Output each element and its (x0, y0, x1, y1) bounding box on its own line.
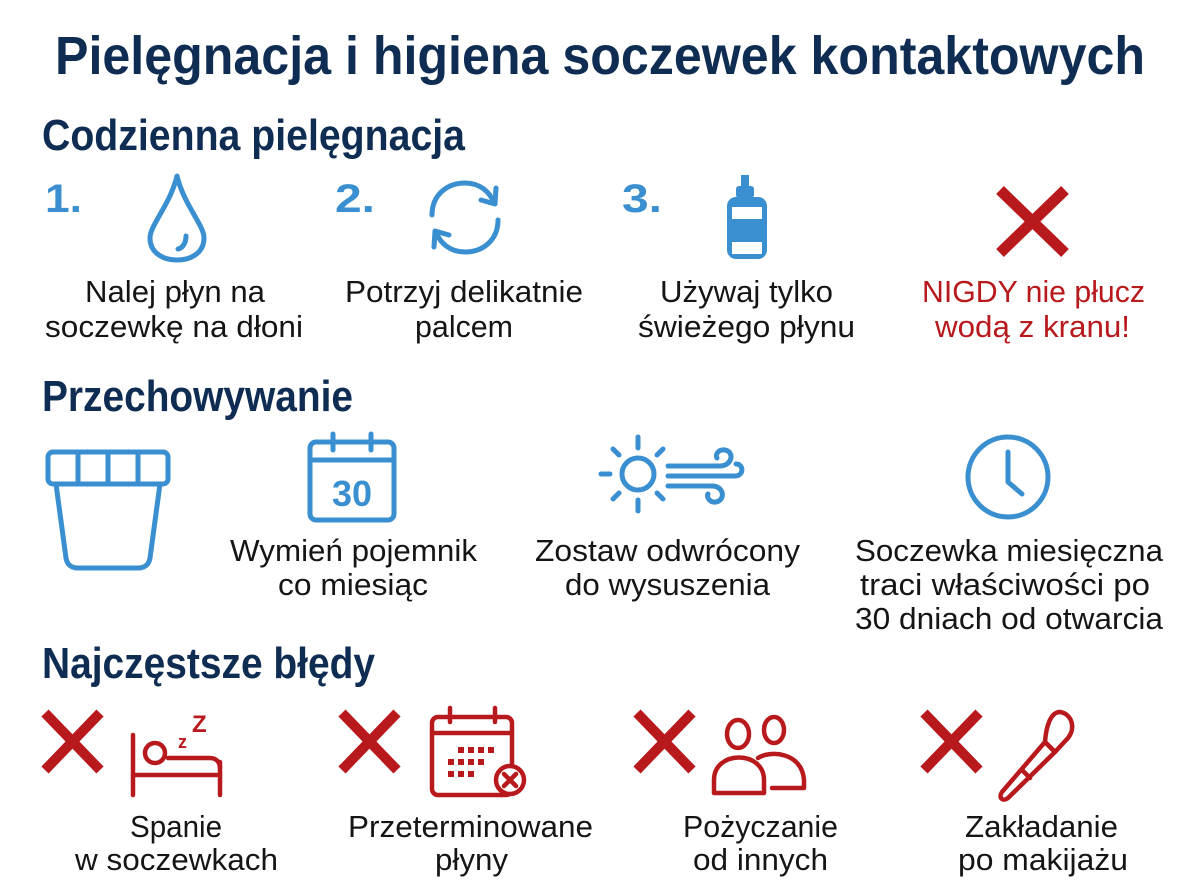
text: monthly lens (855, 533, 1164, 636)
step 1 number: 1. (45, 177, 82, 221)
step 2 text (345, 274, 583, 344)
icon: water drop (150, 176, 204, 260)
mistake 3: borrowing: Pożyczanie (683, 809, 838, 844)
mistake 2: expired fluids (342, 708, 593, 877)
text: leave to dry: Zostaw odwrócony (535, 533, 801, 568)
text: replace container: co miesiąc (278, 567, 428, 602)
title: Pielęgnacja i higiena soczewek kontaktowych (55, 26, 1145, 86)
text: leave to dry (535, 533, 801, 602)
text: monthly lens: 30 dniach od otwarcia (855, 601, 1164, 636)
warning text (922, 274, 1145, 344)
mistake 2: expired fluids: Przeterminowane (348, 809, 593, 844)
heading: Codzienna pielęgnacja: Codzienna pielęgnacja (42, 111, 465, 160)
heading: Przechowywanie: Przechowywanie (42, 372, 353, 421)
mistake 1: sleeping: Z (192, 711, 207, 738)
mistake 4: makeup: Zakładanie (965, 809, 1118, 844)
mistake 1: sleeping: z (178, 732, 187, 752)
mistake 4: makeup (924, 712, 1128, 877)
step 3 text: Używaj tylko (660, 274, 833, 309)
text: leave to dry: do wysuszenia (565, 567, 771, 602)
icon: red X (1000, 190, 1065, 253)
step 1 text: soczewkę na dłoni (45, 309, 303, 344)
mistake 3: borrowing: od innych (693, 842, 828, 877)
step 1 text: Nalej płyn na (85, 274, 266, 309)
icon: container (48, 452, 168, 568)
warning text: NIGDY nie płucz (922, 274, 1145, 309)
step 3 text (638, 274, 855, 344)
step 3 text: świeżego płynu (638, 309, 855, 344)
text: replace container (230, 533, 477, 602)
step 2 text: Potrzyj delikatnie (345, 274, 583, 309)
icon: clock (968, 437, 1048, 517)
icon: sun and wind (601, 437, 742, 511)
text: monthly lens: traci właściwości po (860, 567, 1150, 602)
step 3 number: 3. (622, 177, 662, 221)
mistake 3: borrowing (637, 713, 838, 877)
mistake 1: sleeping (45, 711, 278, 877)
icon: calendar 30: 30 (332, 473, 372, 514)
text: replace container: Wymień pojemnik (230, 533, 477, 568)
icon: calendar 30 (310, 434, 394, 520)
mistake 1: sleeping: w soczewkach (74, 842, 278, 877)
icon: refresh arrows (432, 183, 498, 252)
step 2 number: 2. (335, 177, 375, 221)
mistake 2: expired fluids: płyny (435, 842, 508, 877)
step 1 text (45, 274, 303, 344)
mistake 4: makeup: po makijażu (958, 842, 1128, 877)
icon: bottle (727, 175, 767, 259)
step 2 text: palcem (415, 309, 513, 344)
heading: Najczęstsze błędy: Najczęstsze błędy (42, 639, 375, 688)
warning text: wodą z kranu! (934, 309, 1130, 344)
mistake 1: sleeping: Spanie (130, 809, 222, 844)
text: monthly lens: Soczewka miesięczna (855, 533, 1164, 568)
